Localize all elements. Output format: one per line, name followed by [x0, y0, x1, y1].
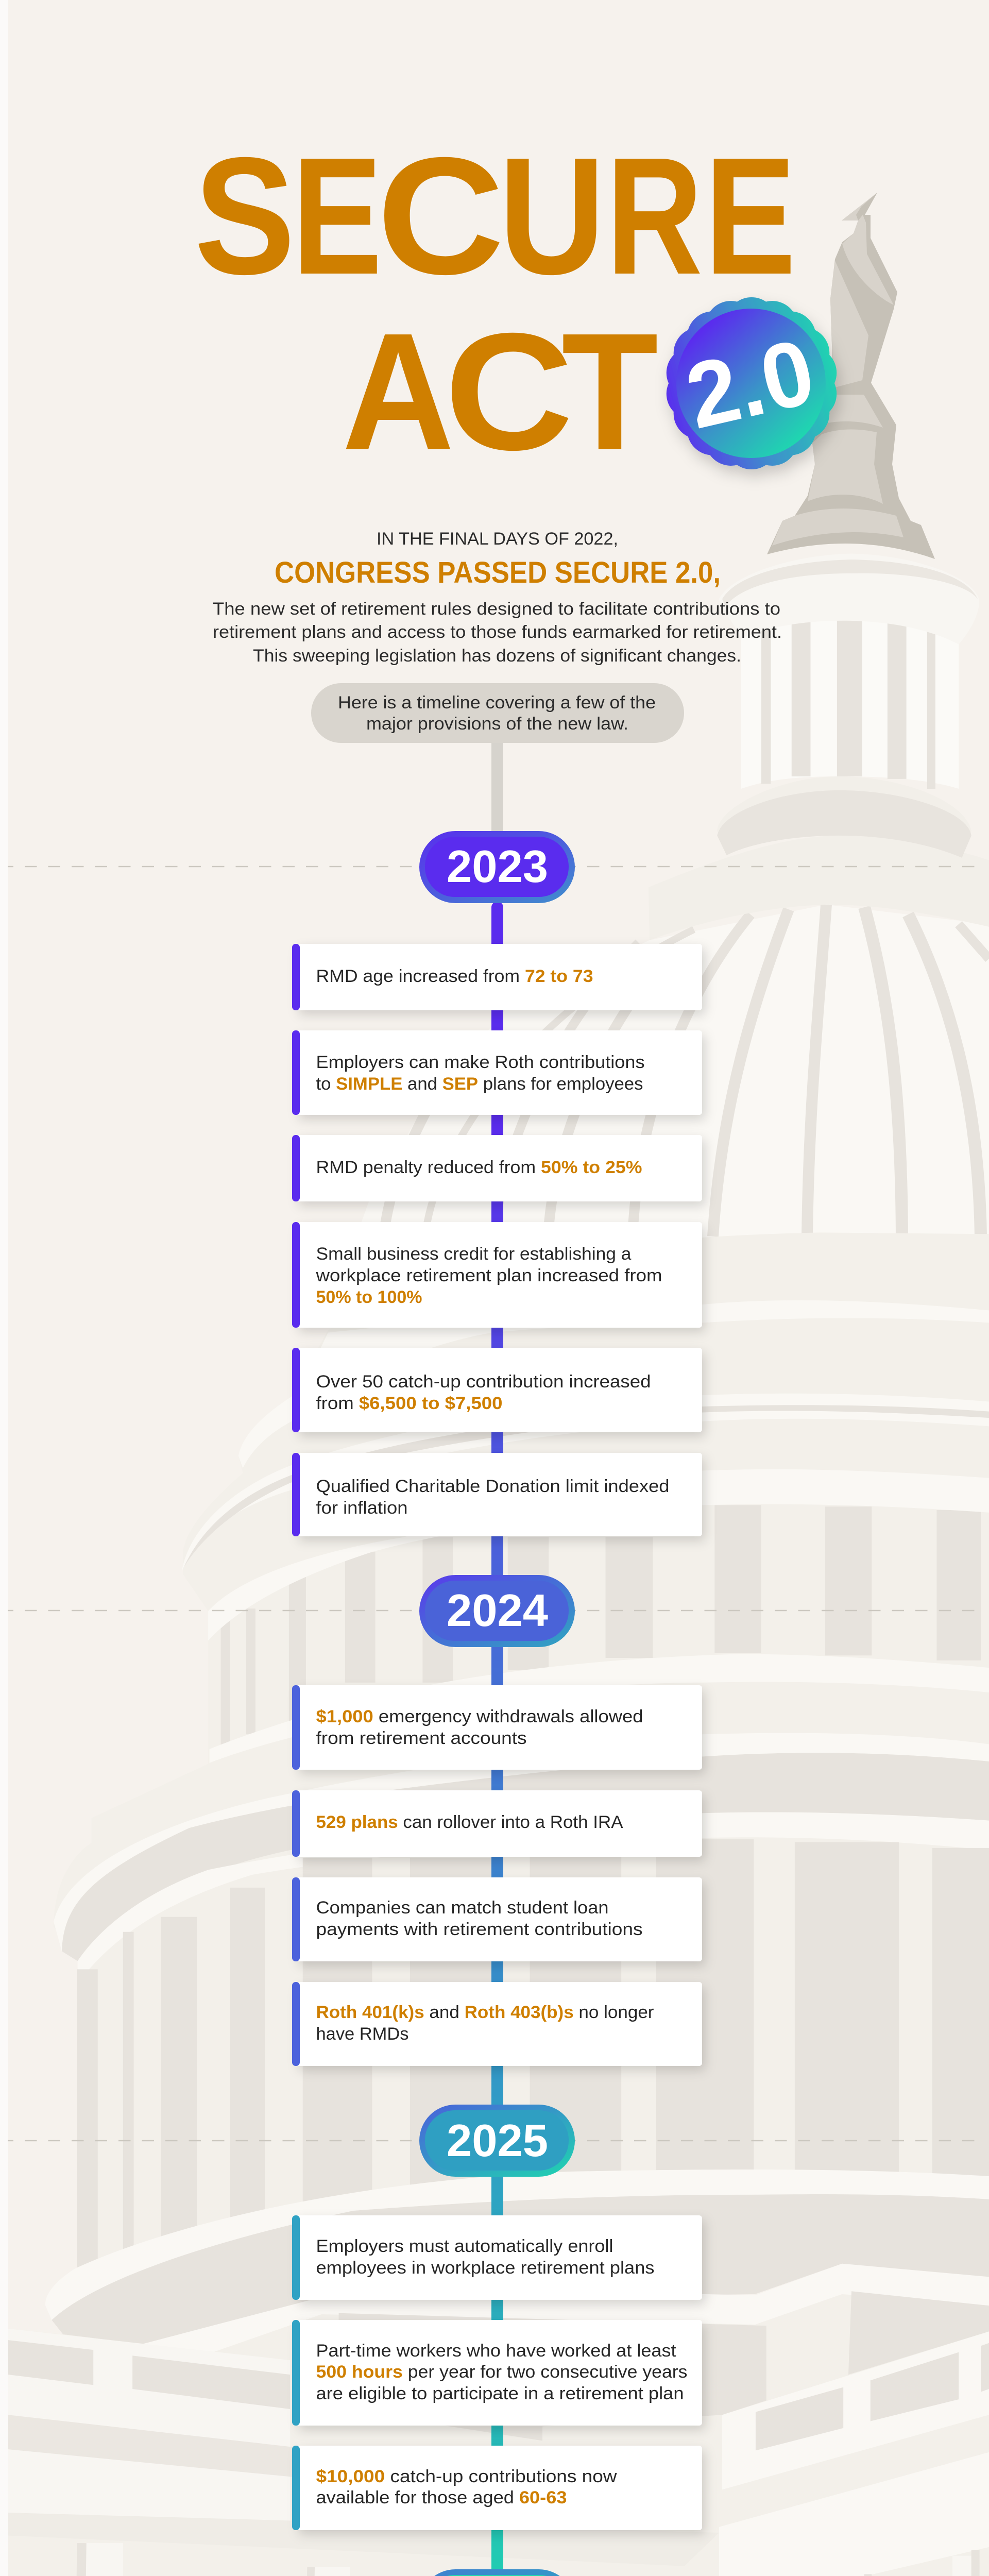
year marker 2025: 2025 — [447, 2115, 548, 2166]
card: charitable donation: Qualified Charitable Donation limit indexed — [316, 1477, 670, 1496]
card: charitable donation — [292, 1453, 702, 1536]
card: small business credit — [292, 1222, 702, 1328]
card: automatic enrollment: Employers must automatically enroll — [316, 2236, 613, 2256]
title: SECURE ACT: E — [292, 123, 382, 309]
capitol: statue on top — [767, 193, 935, 559]
card: emergency withdrawals: from retirement accounts — [316, 1728, 526, 1748]
title: SECURE ACT: C — [445, 298, 573, 485]
timeline intro connector — [491, 742, 503, 832]
card: emergency withdrawals: $1,000 emergency withdrawals allowed — [316, 1707, 643, 1726]
capitol: dome with ribs — [353, 905, 989, 1245]
title: SECURE ACT: E — [705, 123, 796, 309]
year marker 2025 — [419, 2105, 575, 2177]
card: RMD penalty: RMD penalty reduced from 50% to 25% — [316, 1158, 642, 1177]
card: small business credit: 50% to 100% — [316, 1287, 422, 1307]
card: Roth 401(k)s and 403(b)s: Roth 401(k)s and Roth 403(b)s no longer — [316, 2003, 654, 2022]
card: charitable donation: for inflation — [316, 1498, 408, 1518]
title: SECURE ACT — [194, 123, 796, 485]
card: RMD age 72 to 73 — [292, 944, 702, 1010]
card: Roth contributions SIMPLE and SEP — [292, 1030, 702, 1115]
title: SECURE ACT: S — [194, 123, 295, 309]
badge: 2.0 seal — [659, 291, 845, 477]
card: automatic enrollment — [292, 2215, 702, 2300]
card: part-time workers: are eligible to participate in a retirement plan — [316, 2384, 684, 2403]
card: student loan match: Companies can match student loan — [316, 1898, 609, 1918]
card: catch-up contributions 60-63 — [292, 2446, 702, 2530]
card: automatic enrollment: employees in workplace retirement plans — [316, 2258, 654, 2278]
title: SECURE ACT: U — [499, 123, 605, 309]
intro text block: retirement plans and access to those funds earmarked for retirement. — [213, 622, 782, 642]
title: SECURE ACT: C — [377, 123, 504, 309]
section dividers — [1, 867, 975, 2576]
card: RMD penalty — [292, 1135, 702, 1201]
year marker 2024: 2024 — [447, 1585, 548, 1636]
capitol: tower, columns and caps — [649, 554, 989, 940]
card: 529 plans — [292, 1790, 702, 1857]
card: 529 plans: 529 plans can rollover into a Roth IRA — [316, 1812, 623, 1832]
heading: congress passed: CONGRESS PASSED SECURE 2.0, — [275, 556, 721, 589]
title: SECURE ACT: A — [342, 298, 454, 485]
card: catch-up contributions 60-63: available for those aged 60-63 — [316, 2488, 567, 2507]
card: part-time workers: 500 hours per year for two consecutive years — [316, 2362, 687, 2382]
year marker 2023: 2023 — [447, 841, 548, 892]
year marker 2033 — [419, 2569, 575, 2576]
card: part-time workers — [292, 2320, 702, 2426]
title: SECURE ACT: R — [606, 123, 703, 309]
callout pill: timeline intro — [311, 683, 684, 743]
intro text block — [213, 529, 782, 666]
card: small business credit: Small business credit for establishing a — [316, 1244, 632, 1264]
capitol: upper drum with columns — [54, 1232, 989, 2268]
badge: 2.0 seal: 2.0 — [677, 319, 824, 449]
capitol: lower drum, ring and base building — [8, 1839, 989, 2576]
card: Roth contributions SIMPLE and SEP: to SIMPLE and SEP plans for employees — [316, 1074, 643, 1094]
card: Roth contributions SIMPLE and SEP: Employers can make Roth contributions — [316, 1053, 645, 1072]
title: SECURE ACT: T — [561, 298, 658, 485]
card: Roth 401(k)s and 403(b)s: have RMDs — [316, 2024, 409, 2044]
callout pill: timeline intro: major provisions of the new law. — [366, 714, 628, 734]
card: Roth 401(k)s and 403(b)s — [292, 1982, 702, 2066]
card: RMD age 72 to 73: RMD age increased from 72 to 73 — [316, 967, 593, 986]
card: emergency withdrawals — [292, 1685, 702, 1770]
intro text block: The new set of retirement rules designed to facilitate contributions to — [213, 599, 780, 619]
intro text block: IN THE FINAL DAYS OF 2022, — [377, 529, 618, 549]
callout pill: timeline intro: Here is a timeline covering a few of the — [338, 693, 656, 713]
card: catch-up contribution: Over 50 catch-up contribution increased — [316, 1372, 651, 1392]
year marker 2023 — [419, 831, 575, 903]
left page edge — [0, 0, 8, 2576]
card: part-time workers: Part-time workers who have worked at least — [316, 2341, 676, 2361]
year marker 2024 — [419, 1575, 575, 1647]
intro text block: This sweeping legislation has dozens of significant changes. — [253, 646, 741, 666]
card: catch-up contributions 60-63: $10,000 catch-up contributions now — [316, 2467, 617, 2486]
card: catch-up contribution — [292, 1348, 702, 1432]
card: student loan match — [292, 1877, 702, 1961]
card: catch-up contribution: from $6,500 to $7,500 — [316, 1394, 503, 1413]
card: student loan match: payments with retirement contributions — [316, 1920, 643, 1939]
timeline spine — [491, 902, 503, 2576]
card: small business credit: workplace retirement plan increased from — [315, 1266, 662, 1285]
